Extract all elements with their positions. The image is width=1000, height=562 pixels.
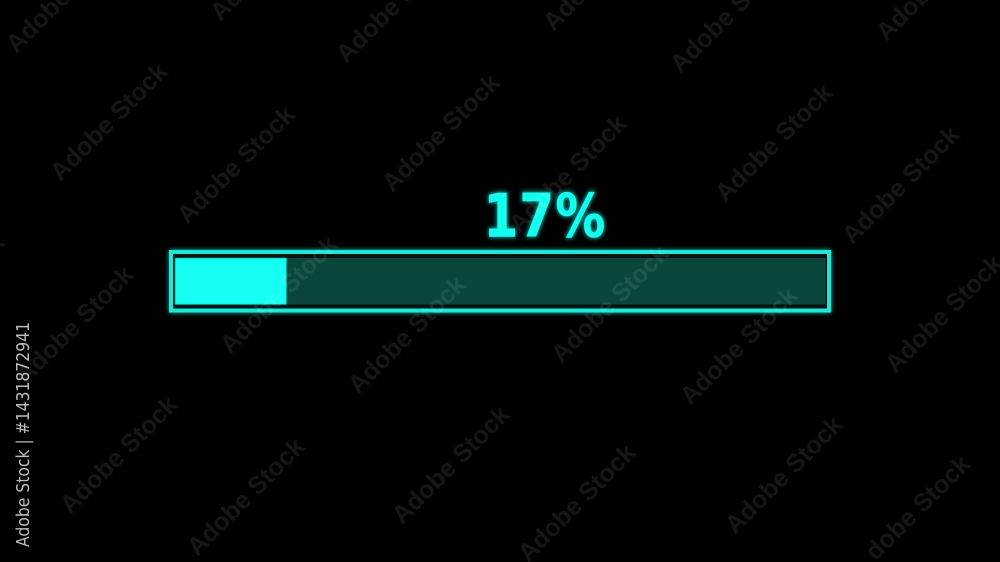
watermark pattern: Adobe Stock: [387, 400, 516, 529]
percentage label: 17%: [484, 182, 606, 252]
watermark pattern: Adobe Stock: [546, 239, 675, 368]
watermark pattern: Adobe Stock: [377, 68, 506, 197]
vertical stock id text: Adobe Stock | #1431872941: [13, 322, 34, 547]
watermark pattern: Adobe Stock: [172, 100, 301, 229]
watermark pattern: Adobe Stock: [710, 78, 839, 207]
watermark pattern: Adobe Stock: [45, 57, 174, 186]
watermark pattern: Adobe Stock: [720, 410, 849, 539]
bar fill 17%: [175, 258, 286, 304]
watermark pattern: Adobe Stock: [11, 260, 140, 389]
watermark pattern: Adobe Stock: [343, 270, 472, 399]
watermark pattern: Adobe Stock: [182, 432, 311, 561]
watermark pattern: Adobe Stock: [675, 281, 804, 410]
watermark pattern: Adobe Stock: [215, 230, 344, 359]
bar outer glow: [171, 252, 829, 310]
percentage label: 17%: [484, 182, 606, 252]
watermark pattern: Adobe Stock: [837, 120, 966, 249]
progress bar: [171, 252, 829, 310]
bar frame: [171, 252, 829, 310]
watermark pattern: Adobe Stock: [504, 109, 633, 238]
watermark pattern: Adobe Stock: [55, 390, 184, 519]
bar track: [175, 258, 826, 304]
